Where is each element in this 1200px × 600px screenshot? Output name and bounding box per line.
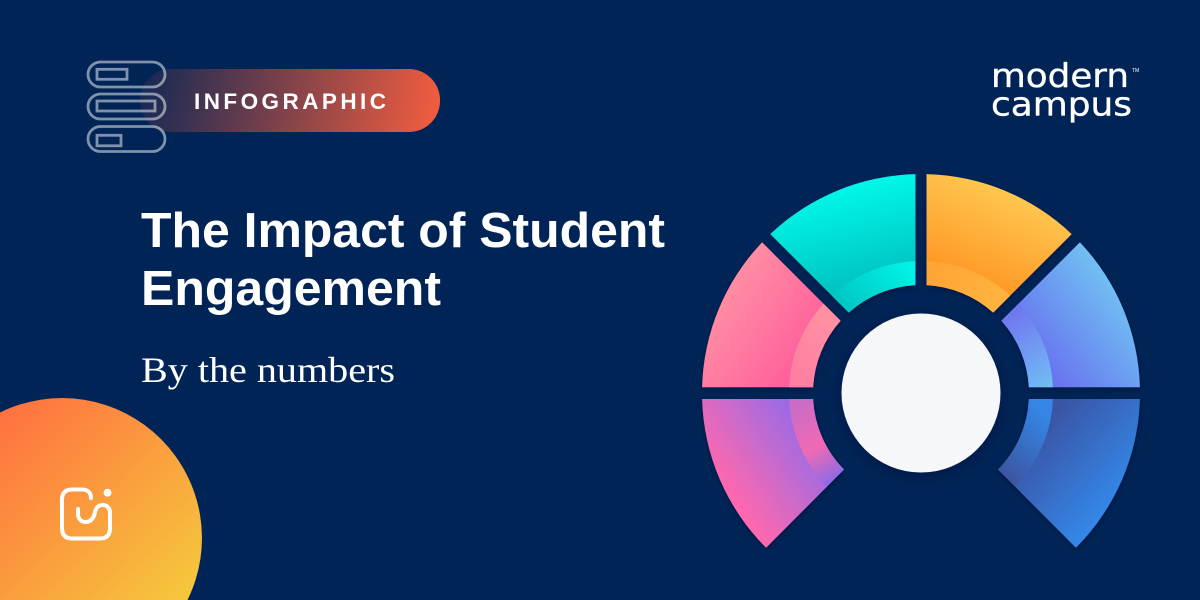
icon: brand mark xyxy=(62,489,112,538)
title line 1: The Impact of Student xyxy=(141,204,665,258)
segment: orange xyxy=(926,174,1072,313)
corner circle with brand icon xyxy=(0,398,202,600)
icon: list of sliders xyxy=(88,62,165,152)
subtitle: By the numbers xyxy=(141,350,395,390)
logo word: campus: campus xyxy=(991,84,1132,124)
badge pill xyxy=(140,69,440,132)
logo trademark: TM xyxy=(1132,68,1139,74)
segment: teal xyxy=(770,174,916,313)
segment: pink xyxy=(702,242,841,387)
center circle xyxy=(842,314,1000,472)
segment: periwinkle blue xyxy=(1001,242,1140,387)
segment: violet xyxy=(702,399,844,548)
badge: infographic xyxy=(88,62,440,152)
title xyxy=(141,204,665,316)
segment: deep blue xyxy=(998,399,1140,548)
logo word: modern: modern xyxy=(991,56,1129,95)
logo: modern campus xyxy=(991,56,1139,124)
title line 2: Engagement xyxy=(141,262,441,316)
radial segment chart xyxy=(702,174,1140,548)
badge label: INFOGRAPHIC xyxy=(194,89,386,114)
orange gradient circle xyxy=(0,398,202,600)
